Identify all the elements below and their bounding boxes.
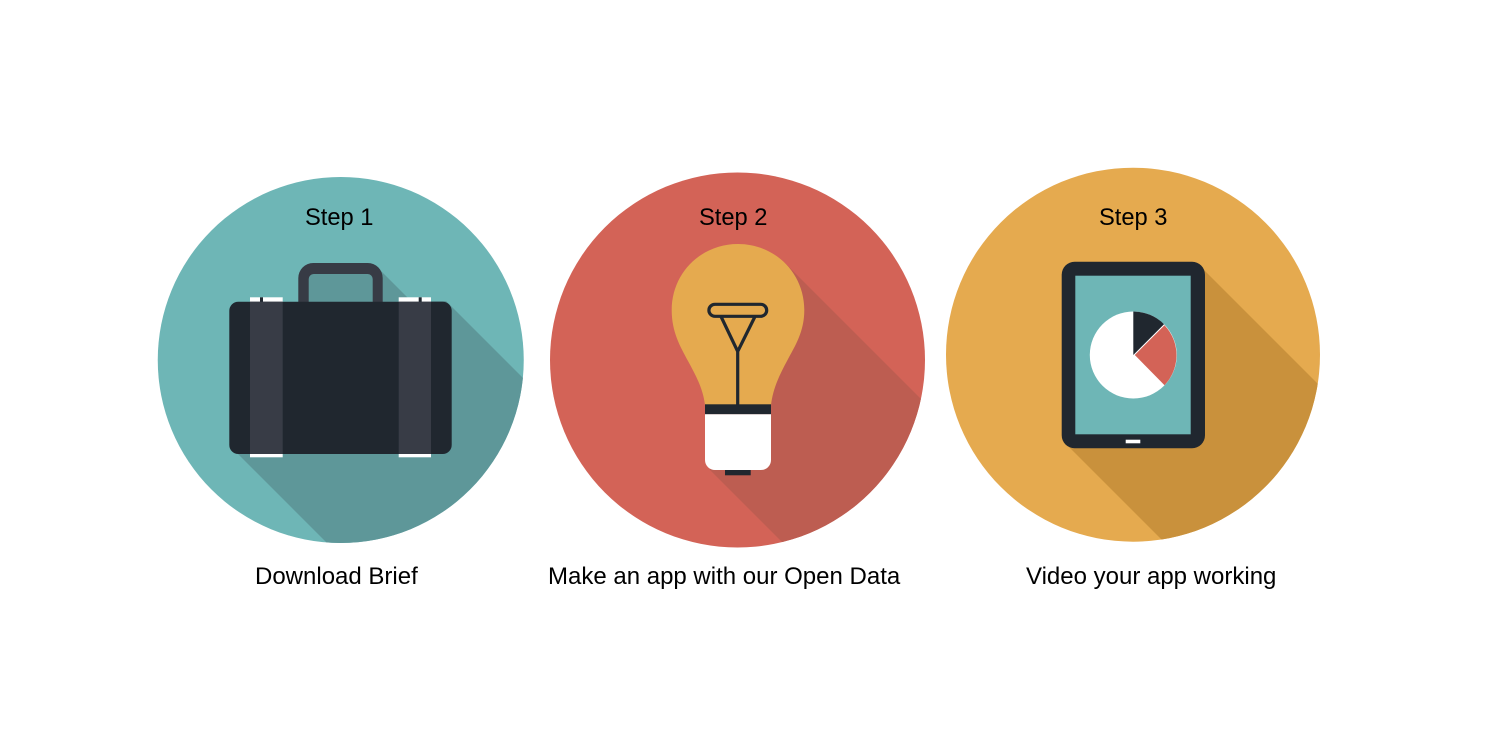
bulb contact bbox=[725, 470, 751, 475]
amber circle bbox=[946, 168, 1320, 542]
long shadow: light bulb bbox=[710, 264, 921, 542]
pie chart bbox=[1090, 312, 1177, 398]
briefcase handle bbox=[298, 263, 383, 303]
caption: step 3: Video your app working bbox=[1026, 563, 1276, 590]
panel: step 2 bbox=[550, 172, 925, 548]
caption: step 1: Download Brief bbox=[255, 563, 418, 590]
icon: light bulb bbox=[672, 244, 804, 475]
red circle bbox=[550, 172, 925, 548]
long shadow: tablet bbox=[1069, 270, 1318, 540]
filament bbox=[709, 304, 767, 405]
panel: step 1 bbox=[158, 177, 524, 543]
left strap bbox=[250, 302, 283, 454]
bulb glass bbox=[672, 244, 804, 405]
home button bbox=[1126, 440, 1140, 443]
strap clips bbox=[250, 297, 431, 457]
teal circle bbox=[158, 177, 524, 543]
right strap bbox=[399, 302, 431, 454]
panel: step 3 bbox=[946, 168, 1320, 542]
caption: step 2: Make an app with our Open Data bbox=[548, 563, 901, 590]
briefcase body bbox=[229, 302, 452, 454]
step 1 label: Step 1 bbox=[305, 205, 373, 231]
bulb collar bbox=[705, 404, 771, 414]
icon: tablet bbox=[1062, 262, 1205, 448]
step 2 label: Step 2 bbox=[699, 205, 767, 231]
icon: briefcase bbox=[229, 263, 452, 457]
step 3 label: Step 3 bbox=[1099, 205, 1167, 231]
tablet body bbox=[1062, 262, 1205, 448]
tablet screen bbox=[1075, 276, 1191, 434]
bulb base bbox=[705, 414, 771, 470]
long shadow: briefcase bbox=[238, 271, 523, 543]
